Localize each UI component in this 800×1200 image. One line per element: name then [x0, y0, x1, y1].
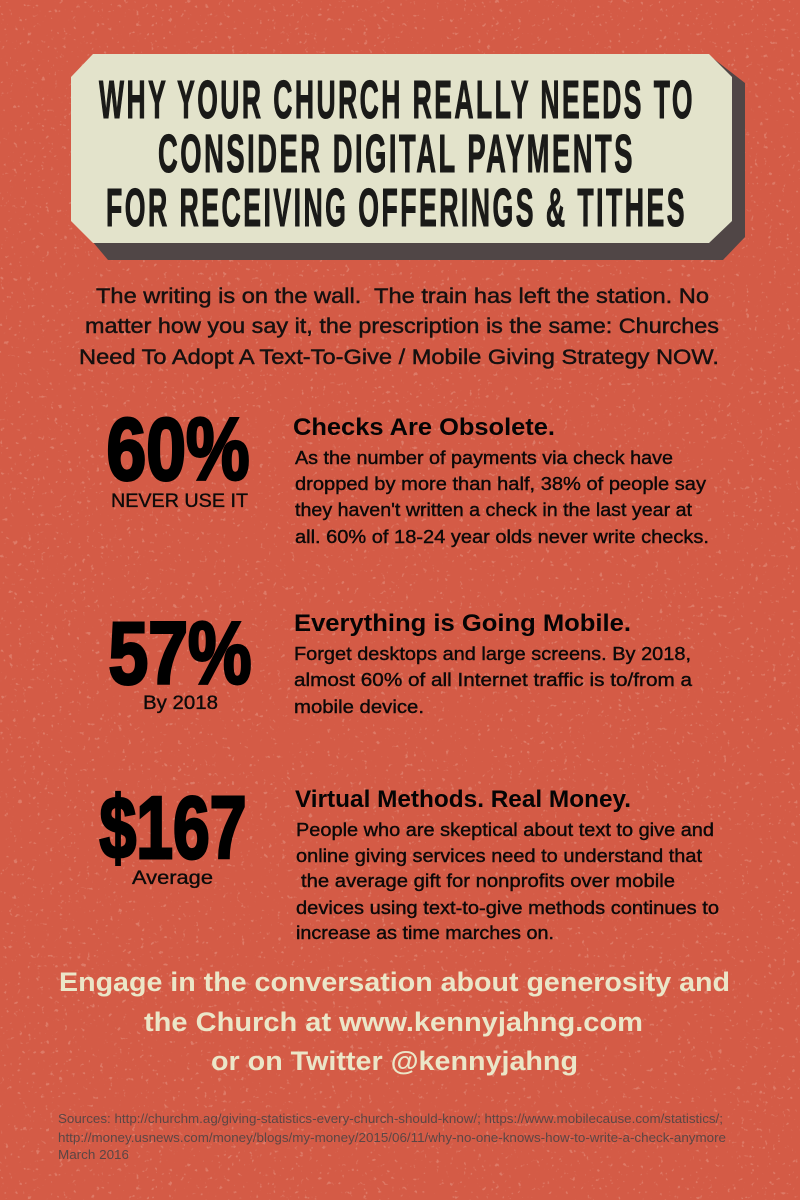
- banner shadow: [87, 59, 745, 260]
- stat section: checks: [106, 400, 709, 547]
- stat section: mobile: [108, 604, 693, 717]
- call to action: the Church at www.kennyjahng.com: [144, 1007, 643, 1037]
- heading: everything is going mobile: Everything is Going Mobile.: [294, 610, 631, 637]
- stat: 60%: 60%: [106, 400, 250, 498]
- body: money: online giving services need to understand that: [296, 845, 702, 866]
- heading: checks are obsolete: Checks Are Obsolete.: [293, 414, 555, 441]
- title banner: [71, 54, 745, 260]
- intro paragraph: [79, 285, 719, 369]
- banner plate: [71, 54, 732, 243]
- call to action: Engage in the conversation about generosity and: [59, 967, 730, 997]
- body: money: [296, 819, 719, 943]
- body: checks: As the number of payments via check have: [295, 447, 673, 468]
- body: checks: all. 60% of 18-24 year olds never write checks.: [295, 526, 709, 547]
- stat label: by 2018: By 2018: [143, 693, 218, 714]
- intro paragraph: Need To Adopt A Text-To-Give / Mobile Giving Strategy NOW.: [79, 346, 719, 369]
- stat label: never use it: NEVER USE IT: [111, 491, 248, 512]
- call to action: [59, 967, 730, 1076]
- body: mobile: almost 60% of all Internet traffic is to/from a: [294, 669, 693, 690]
- stat section: money: [100, 778, 719, 943]
- sources: March 2016: [58, 1147, 129, 1162]
- sources: http://money.usnews.com/money/blogs/my-money/2015/06/11/why-no-one-knows-how-to-write-a-check-anymore: [58, 1130, 726, 1145]
- body: money: devices using text-to-give methods continues to: [296, 897, 719, 918]
- stat: 57%: 57%: [108, 604, 252, 702]
- intro paragraph: The writing is on the wall. The train has left the station. No: [96, 285, 709, 308]
- sources: Sources: http://churchm.ag/giving-statistics-every-church-should-know/; https://www.mobilecause.com/statistics/;: [58, 1111, 723, 1126]
- stat: $167: $167: [100, 778, 246, 877]
- body: mobile: Forget desktops and large screens. By 2018,: [294, 643, 691, 664]
- stat label: average: Average: [132, 868, 213, 889]
- body: mobile: [294, 643, 693, 717]
- body: mobile: mobile device.: [294, 696, 424, 717]
- body: checks: [295, 447, 709, 547]
- heading: virtual methods: Virtual Methods. Real Money.: [295, 786, 631, 813]
- body: money: increase as time marches on.: [296, 922, 554, 943]
- title text: [99, 70, 695, 238]
- body: money: People who are skeptical about text to give and: [296, 819, 714, 840]
- intro paragraph: matter how you say it, the prescription is the same: Churches: [85, 315, 719, 338]
- sources: [58, 1111, 726, 1162]
- body: checks: dropped by more than half, 38% of people say: [295, 473, 707, 494]
- body: money: the average gift for nonprofits over mobile: [301, 870, 675, 891]
- body: checks: they haven't written a check in the last year at: [295, 499, 692, 520]
- call to action: or on Twitter @kennyjahng: [211, 1046, 578, 1076]
